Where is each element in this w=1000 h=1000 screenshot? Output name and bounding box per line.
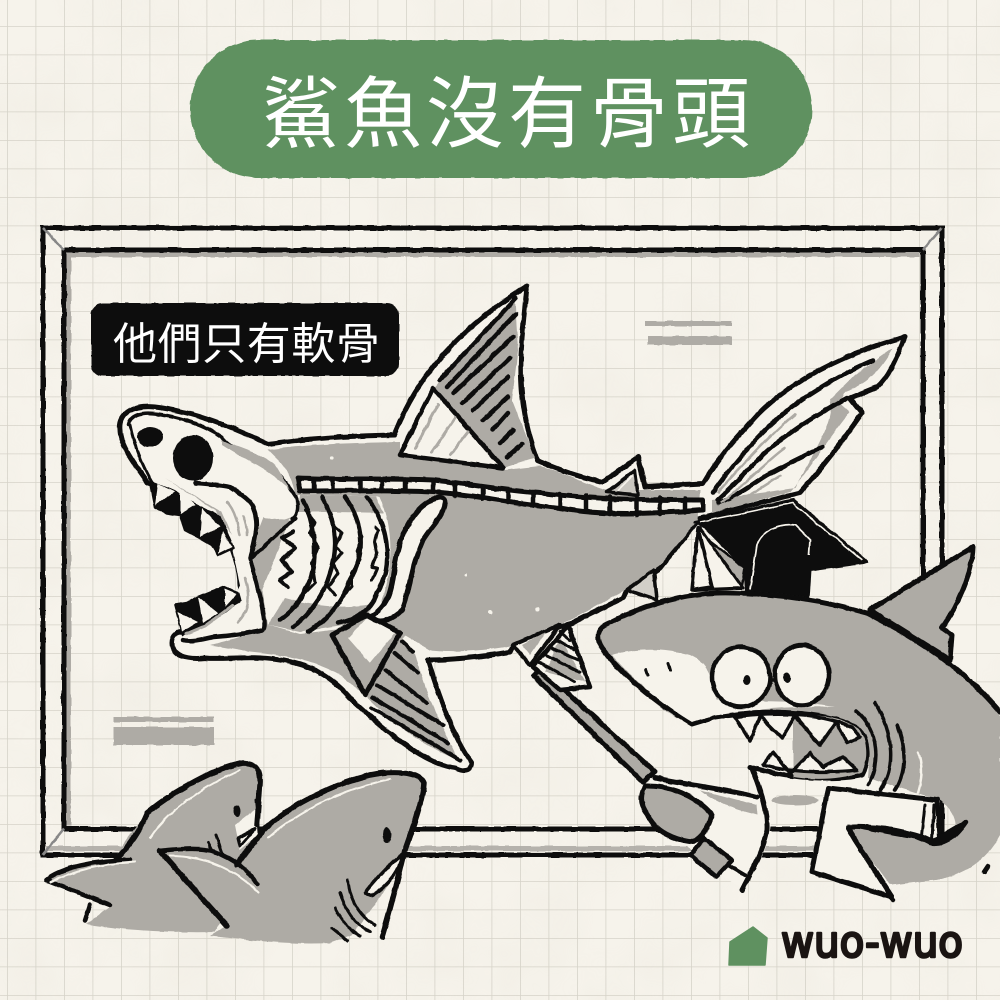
pointer: [534, 668, 655, 782]
audience shark left: [46, 763, 262, 932]
skull details: [128, 413, 298, 641]
title banner: [190, 40, 812, 178]
body gray with head: [598, 593, 1000, 885]
lower jaw and teeth: [175, 578, 248, 635]
whiteboard frame: [43, 228, 942, 855]
board note lines top right: [645, 321, 732, 345]
teacher shark: [534, 547, 1000, 900]
spine: [298, 478, 703, 515]
gill lines: [856, 703, 904, 790]
upper teeth: [150, 478, 233, 555]
pointer handle: [690, 838, 732, 877]
arm and chest: [645, 768, 940, 895]
pelvic fin: [513, 625, 590, 690]
pectoral fin: [332, 615, 460, 760]
fist: [642, 786, 712, 842]
tail tip: [848, 800, 1000, 885]
glasses: [712, 645, 829, 707]
title banner: 鯊魚沒有骨頭: [262, 70, 750, 158]
shark skeleton diagram: [120, 286, 905, 771]
audience shark right: [160, 772, 424, 943]
brand logo: wuo-wuo: [781, 917, 963, 968]
body outline: [120, 286, 905, 771]
label: cartilage: [91, 303, 399, 376]
graduation cap: [692, 500, 867, 600]
sleeve and right arm: [812, 788, 940, 897]
second dorsal fin: [607, 470, 638, 495]
snout underside: [612, 650, 835, 722]
anal fin: [627, 570, 657, 600]
tail fin: [712, 348, 893, 513]
label: cartilage: 他們只有軟骨: [113, 320, 380, 369]
rib cage and gills: [262, 495, 390, 634]
back fin: [870, 547, 973, 660]
icon: house: [729, 927, 767, 965]
shoulder girdle: [370, 497, 445, 621]
board note lines bottom left: [113, 717, 214, 745]
head outline: [598, 593, 1000, 778]
dorsal fin: [400, 298, 535, 468]
mouth: [735, 714, 866, 779]
body gray fill: [210, 442, 700, 695]
